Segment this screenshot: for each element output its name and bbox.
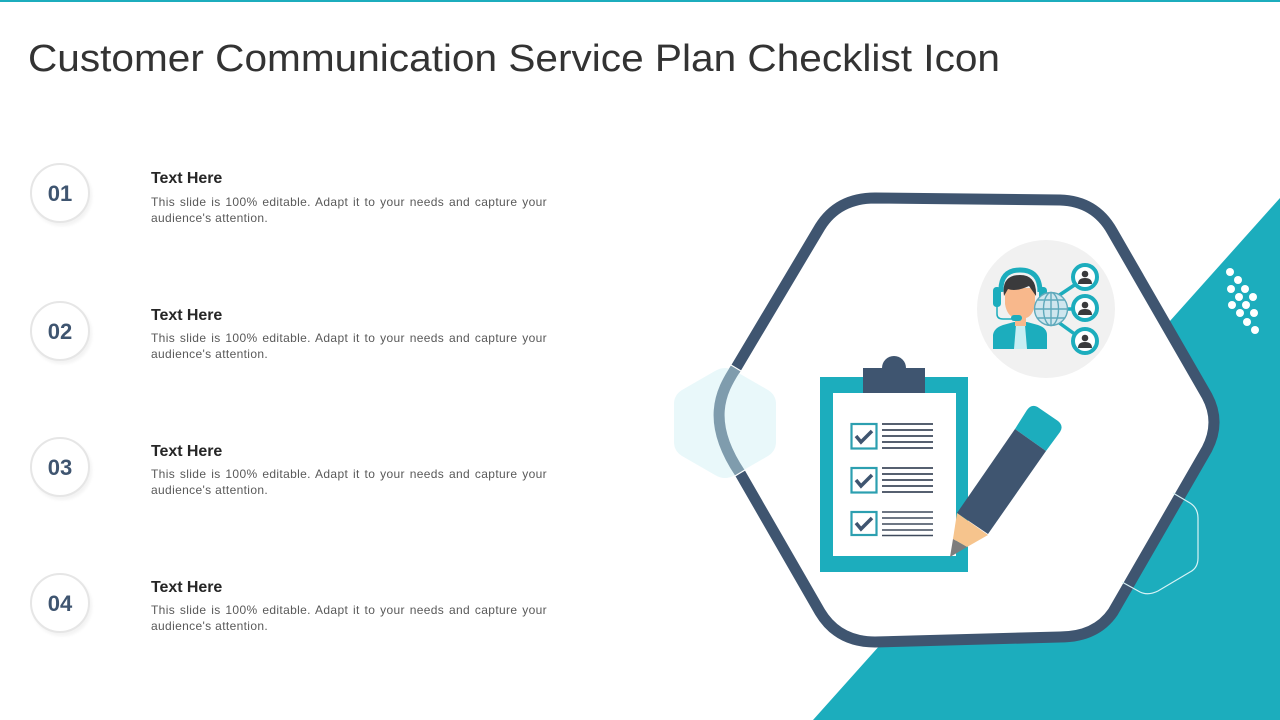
teal corner triangle xyxy=(813,198,1280,720)
number badge 04: 04 xyxy=(48,591,72,616)
headset band xyxy=(1001,270,1040,292)
number badge 03: 03 xyxy=(48,455,72,480)
clipboard xyxy=(820,356,968,572)
item heading: Text Here xyxy=(151,307,222,324)
item description: This slide is 100% editable. Adapt it to your needs and capture your audience's attention. xyxy=(151,467,547,497)
globe xyxy=(1034,292,1068,326)
list item 03 xyxy=(30,437,547,499)
number badge 02 xyxy=(30,301,90,361)
segment end caps xyxy=(731,365,745,476)
dot pattern xyxy=(1226,268,1259,334)
list item 02 xyxy=(30,301,547,363)
checklist row 2 xyxy=(852,468,933,492)
shirt and tie xyxy=(1014,325,1027,349)
hair xyxy=(1004,275,1036,296)
list item 04 xyxy=(30,573,547,635)
gray circle backdrop xyxy=(977,240,1115,378)
top accent bar xyxy=(0,0,1280,2)
list item 01 xyxy=(30,163,547,225)
item description: This slide is 100% editable. Adapt it to your needs and capture your audience's attention. xyxy=(151,603,547,633)
outlined hexagon accent xyxy=(1122,493,1198,594)
number badge 01: 01 xyxy=(48,181,72,206)
number badge 01 xyxy=(30,163,90,223)
user node bottom xyxy=(1073,329,1097,353)
pale hexagon accent xyxy=(674,368,776,478)
item description: This slide is 100% editable. Adapt it to your needs and capture your audience's attention. xyxy=(151,195,547,225)
number badge 02: 02 xyxy=(48,319,72,344)
customer service network icon xyxy=(977,240,1115,378)
number badge 04 xyxy=(30,573,90,633)
face xyxy=(1005,288,1035,326)
network connectors xyxy=(1058,284,1076,335)
large hexagon frame xyxy=(719,198,1214,642)
pencil xyxy=(950,406,1062,557)
item description: This slide is 100% editable. Adapt it to your needs and capture your audience's attention. xyxy=(151,331,547,361)
number badge 03 xyxy=(30,437,90,497)
user node middle xyxy=(1073,296,1097,320)
item heading: Text Here xyxy=(151,443,222,460)
item heading: Text Here xyxy=(151,170,222,187)
item heading: Text Here xyxy=(151,579,222,596)
agent torso xyxy=(993,322,1047,349)
user node top xyxy=(1073,265,1097,289)
title: Customer Communication Service Plan Checklist Icon xyxy=(28,38,1000,80)
checklist row 1 xyxy=(852,424,933,448)
ear cups xyxy=(993,287,1001,307)
faded hexagon segment xyxy=(719,368,740,473)
checklist row 3 xyxy=(852,512,933,536)
microphone xyxy=(997,306,1014,319)
